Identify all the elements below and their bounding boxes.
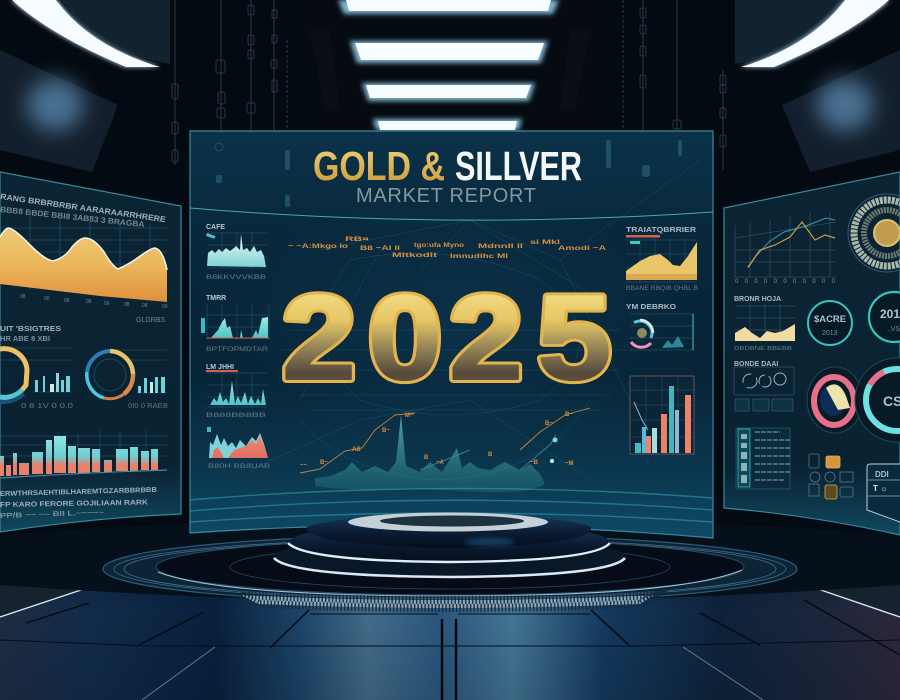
left side panel	[0, 172, 181, 532]
bottom bar chart	[0, 430, 167, 478]
mini chart: right column gold area: TRAIATQBRRIER	[626, 227, 696, 234]
orange data labels: ~ ~A:Mkgo lo	[288, 243, 348, 250]
ceiling recess	[300, 0, 600, 135]
orange data labels: RB¤	[345, 236, 370, 243]
donut group heading: UIT 'BSIGTRES	[0, 324, 61, 333]
small ring chart box	[734, 361, 794, 411]
headline year 2025: 2025	[282, 270, 611, 405]
mini chart: left column 4: B80H BB8UAB	[208, 464, 270, 470]
mini chart: left column 1: B8KKVVVKBB	[206, 275, 266, 281]
bottom centre chart: B~	[565, 412, 573, 418]
donut right: 0I0 0 RAEB	[128, 403, 168, 410]
stage platform	[273, 512, 626, 577]
orange data labels: Amodi ~A	[558, 245, 606, 252]
mini chart: left column 2	[201, 295, 269, 353]
gold area chart: 00	[104, 301, 110, 307]
bottom centre chart: ~B	[530, 460, 539, 466]
mini chart: right column bars	[630, 376, 694, 454]
icon cluster	[809, 454, 853, 499]
mini chart: left column 1: CAFE	[206, 224, 225, 231]
bottom centre chart: ~M	[565, 461, 574, 467]
line chart	[735, 212, 836, 285]
bottom centre chart: B	[424, 455, 429, 461]
stage rings	[103, 535, 797, 608]
hanging data strands	[172, 0, 726, 170]
donut left	[0, 348, 73, 410]
teal gauge circle two: ..VS	[887, 326, 900, 333]
footer text: PP/B ~~ ~~ BII L.~~~~~	[0, 509, 104, 520]
chart header text: RANG BRBRBRBR AARARAARRHRERE	[0, 192, 167, 224]
gold area chart: 08	[142, 303, 148, 309]
teal gauge circle: $ACRE	[814, 314, 846, 325]
pink donut	[807, 367, 863, 433]
footer text	[0, 487, 157, 520]
mini chart: left column 1	[206, 224, 267, 281]
gold area chart: 00	[44, 296, 50, 302]
footer text: FP KARO FERORE GOJILIAAN RARK	[0, 499, 148, 509]
top light ring	[348, 512, 548, 532]
bottom centre chart: B~	[382, 428, 390, 434]
bottom centre chart: ~A	[436, 460, 445, 466]
mini chart: right column donut: YM DEBRKO	[626, 304, 677, 311]
dial	[848, 194, 900, 272]
mini chart: right column gold area: BBANE RBQIB QHBL B	[626, 286, 698, 292]
donut left: 0 8 1V 0 0.0	[21, 403, 73, 410]
gold area chart	[0, 210, 168, 324]
orange data labels: B8 ~AI ll	[360, 245, 400, 252]
mini chart: left column 4	[207, 427, 270, 470]
small ring chart box: BONDE DAAI	[734, 361, 778, 368]
network map lines	[250, 160, 700, 480]
dark band behind the stage	[0, 518, 900, 602]
orange data labels: si Mkl	[530, 239, 560, 246]
floor	[0, 535, 900, 700]
small area chart	[734, 296, 795, 352]
white outlined card: DDI	[875, 470, 889, 479]
right wall panel with curved light	[735, 0, 900, 172]
donut group heading: HR ABE 8 XBI	[0, 334, 50, 343]
left wall panel with curved light	[0, 0, 170, 172]
orange data labels	[288, 236, 606, 260]
line chart: 0 0 0 0 0 0 0 0 0 0 0	[735, 279, 836, 285]
cyan donut	[855, 358, 900, 442]
mini chart: left column 3: LM JHHI	[206, 364, 234, 371]
mini chart: left column 2: BPTFOPMDTAR	[206, 347, 269, 353]
gold area chart: GLGRBS	[136, 317, 166, 324]
mini chart: left column 3: B888BB8BB	[206, 413, 266, 419]
title: GOLD &	[313, 143, 445, 189]
gold area chart: 08	[124, 302, 130, 308]
white outlined card: T ☼	[873, 484, 887, 493]
gold area chart: 08	[64, 298, 70, 304]
bottom centre chart: M~	[405, 413, 414, 419]
headline year 2025: 2025	[282, 270, 611, 405]
gold area chart: 00	[162, 304, 168, 310]
teal gauge circle two	[869, 292, 900, 342]
bottom centre chart	[300, 408, 590, 492]
footer text: ERWTHRSAEHTIBLHAREMTGZARBBRBBB	[0, 487, 157, 498]
centre glass panel	[190, 131, 713, 538]
teal gauge circle	[808, 301, 852, 345]
bottom centre chart: ~~	[300, 463, 308, 469]
subtitle: MARKET REPORT	[356, 185, 536, 207]
document card	[736, 428, 790, 489]
upper tier	[287, 522, 611, 562]
lower tier	[273, 538, 626, 577]
bottom centre chart: B	[488, 452, 493, 458]
bottom centre chart: B~	[545, 421, 553, 427]
orange data labels: Mltkodlt	[392, 252, 438, 259]
orange data labels: lmnudlhc Ml	[450, 253, 508, 260]
mini chart: right column donut	[624, 304, 693, 350]
title	[313, 143, 582, 189]
white outlined card	[867, 464, 900, 522]
chart header text: BBB8 BBDE BBI8 3AB83 3 BRAGBA	[0, 205, 145, 229]
grate band	[241, 595, 654, 608]
ceiling lights	[338, 0, 559, 130]
orange data labels: tgo:ufa Myno	[414, 242, 464, 249]
bottom centre chart: B~	[320, 460, 328, 466]
orange data labels: Mdnnll ll	[478, 243, 523, 250]
small area chart: DBDBNE BBEBB	[734, 346, 792, 352]
bottom centre chart: AB	[352, 447, 361, 453]
gold area chart: 08	[86, 299, 92, 305]
right side panel	[724, 172, 900, 535]
donut right	[87, 350, 168, 410]
donut group heading	[0, 324, 61, 343]
dome top	[307, 513, 591, 548]
floor panel seams	[0, 600, 900, 700]
title: SILLVER	[455, 143, 582, 189]
mini chart: left column 2: TMRR	[206, 295, 226, 302]
mini chart: right column gold area	[626, 227, 698, 292]
gold area chart: 08	[20, 294, 26, 300]
small area chart: BRONR HOJA	[734, 296, 781, 303]
teal gauge circle: 2013	[822, 330, 838, 337]
mini chart: left column 3	[206, 364, 267, 419]
